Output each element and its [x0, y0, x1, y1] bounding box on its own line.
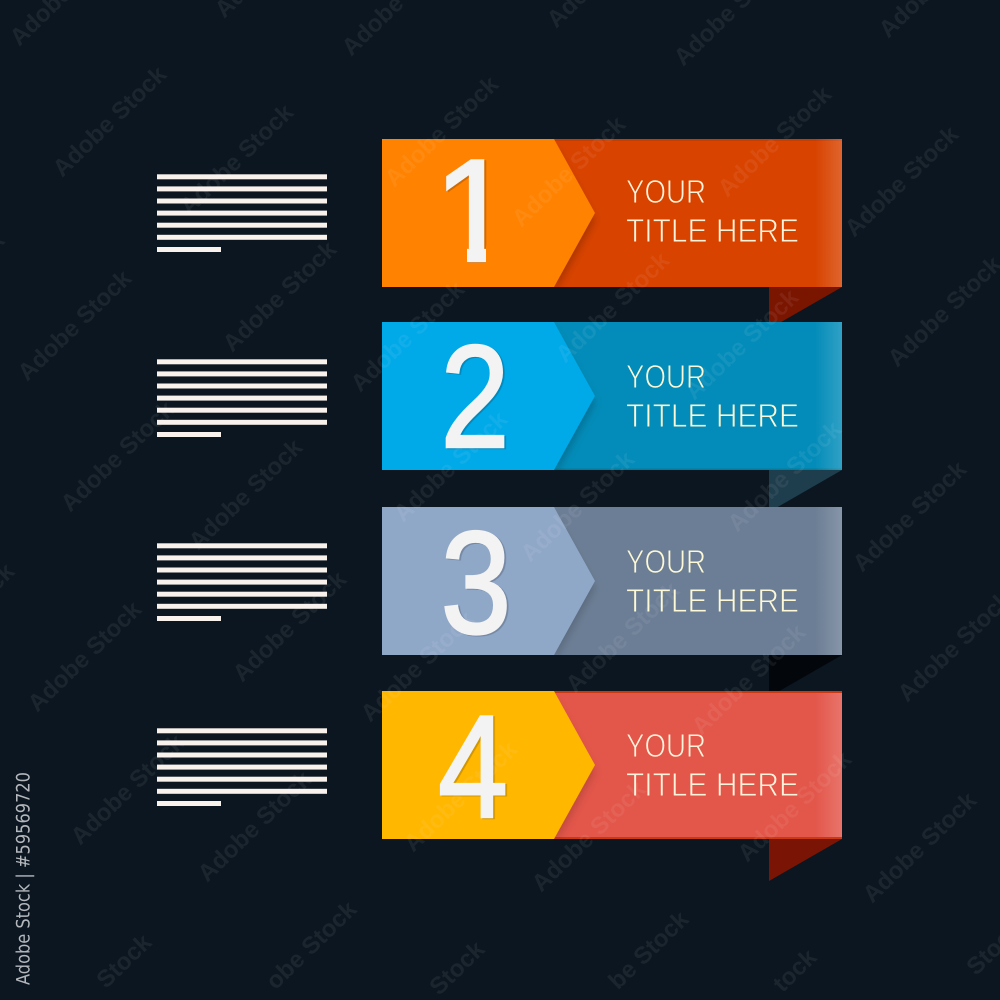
title 2: [626, 358, 799, 434]
title 3: YOUR: [626, 543, 706, 580]
watermarks: Stock: [424, 935, 491, 1000]
watermarks: Adobe Stock: [507, 110, 631, 232]
title 4: [626, 727, 799, 803]
watermarks: Adobe Stock: [840, 120, 964, 242]
watermarks: Adobe Stock: [680, 283, 804, 405]
watermarks: Adobe Stock: [399, 735, 523, 857]
watermarks: Adobe Stock: [23, 595, 147, 717]
watermarks: Adobe Stock: [184, 433, 308, 555]
title 1: YOUR: [626, 173, 706, 210]
title 2: YOUR: [626, 358, 706, 395]
watermarks: Adobe Stock: [175, 98, 299, 220]
watermarks: Adobe Stock: [713, 80, 837, 202]
watermarks: Adobe Stock: [193, 765, 317, 887]
ribbon fold: step 3: [769, 655, 842, 697]
title 1: [626, 173, 799, 249]
watermarks: Adobe Stock: [551, 246, 675, 368]
watermarks: be Stock: [603, 905, 695, 995]
watermarks: Adobe Stock: [516, 445, 640, 567]
watermarks: Adobe Stock: [858, 786, 982, 908]
ribbon fold: step 4: [769, 839, 842, 881]
text placeholder: step 1: [157, 174, 327, 252]
text placeholder: step 4: [157, 728, 327, 806]
title 3: TITLE HERE: [626, 582, 799, 619]
watermarks: Adobe Stock: [13, 264, 137, 386]
watermarks: tock: [768, 943, 823, 998]
watermarks: Adobe Stock: [228, 565, 352, 687]
panel: step 2: [382, 314, 842, 478]
watermarks: Adobe Stock: [48, 60, 172, 182]
watermarks: Adobe Stock: [66, 728, 190, 850]
vertical stock id label: Adobe Stock | #59569720: [12, 772, 34, 985]
watermarks: Adobe Stock: [56, 395, 180, 517]
watermarks: Adobe Stock: [723, 415, 847, 537]
title 1: TITLE HERE: [626, 212, 799, 249]
ribbon fold: step 1: [769, 287, 842, 329]
title 4: YOUR: [626, 727, 706, 764]
panel: step 1: [382, 139, 842, 287]
watermarks: Adobe Stock: [356, 605, 480, 727]
number 2: 2: [440, 314, 510, 478]
watermarks: obe Stock: [261, 895, 363, 995]
title 2: TITLE HERE: [626, 397, 799, 434]
watermarks: Adobe Stock: [346, 275, 470, 397]
watermarks: Adobe Stock: [218, 235, 342, 357]
number 3: 3: [441, 501, 511, 664]
panel: step 3: [382, 501, 842, 664]
watermarks: Adobe Stock: [848, 455, 972, 577]
ribbon fold: step 2: [769, 470, 842, 512]
text placeholder: step 3: [157, 543, 327, 621]
watermarks: Adobe Stock: [527, 775, 651, 897]
number 4: 4: [438, 685, 508, 848]
panel: step 4: [382, 685, 842, 848]
watermarks: Adobe Stock: [389, 405, 513, 527]
watermarks: Adobe Stock: [380, 70, 504, 192]
number 1: 1: [433, 129, 515, 292]
watermarks: Adobe Stock: [733, 745, 857, 867]
watermarks: Stock: [91, 928, 158, 994]
watermarks: Adobe Stock: [687, 618, 811, 740]
title 3: [626, 543, 799, 619]
title 4: TITLE HERE: [626, 766, 799, 803]
text placeholder: step 2: [157, 359, 327, 437]
watermarks: Adobe Stock: [561, 576, 685, 698]
